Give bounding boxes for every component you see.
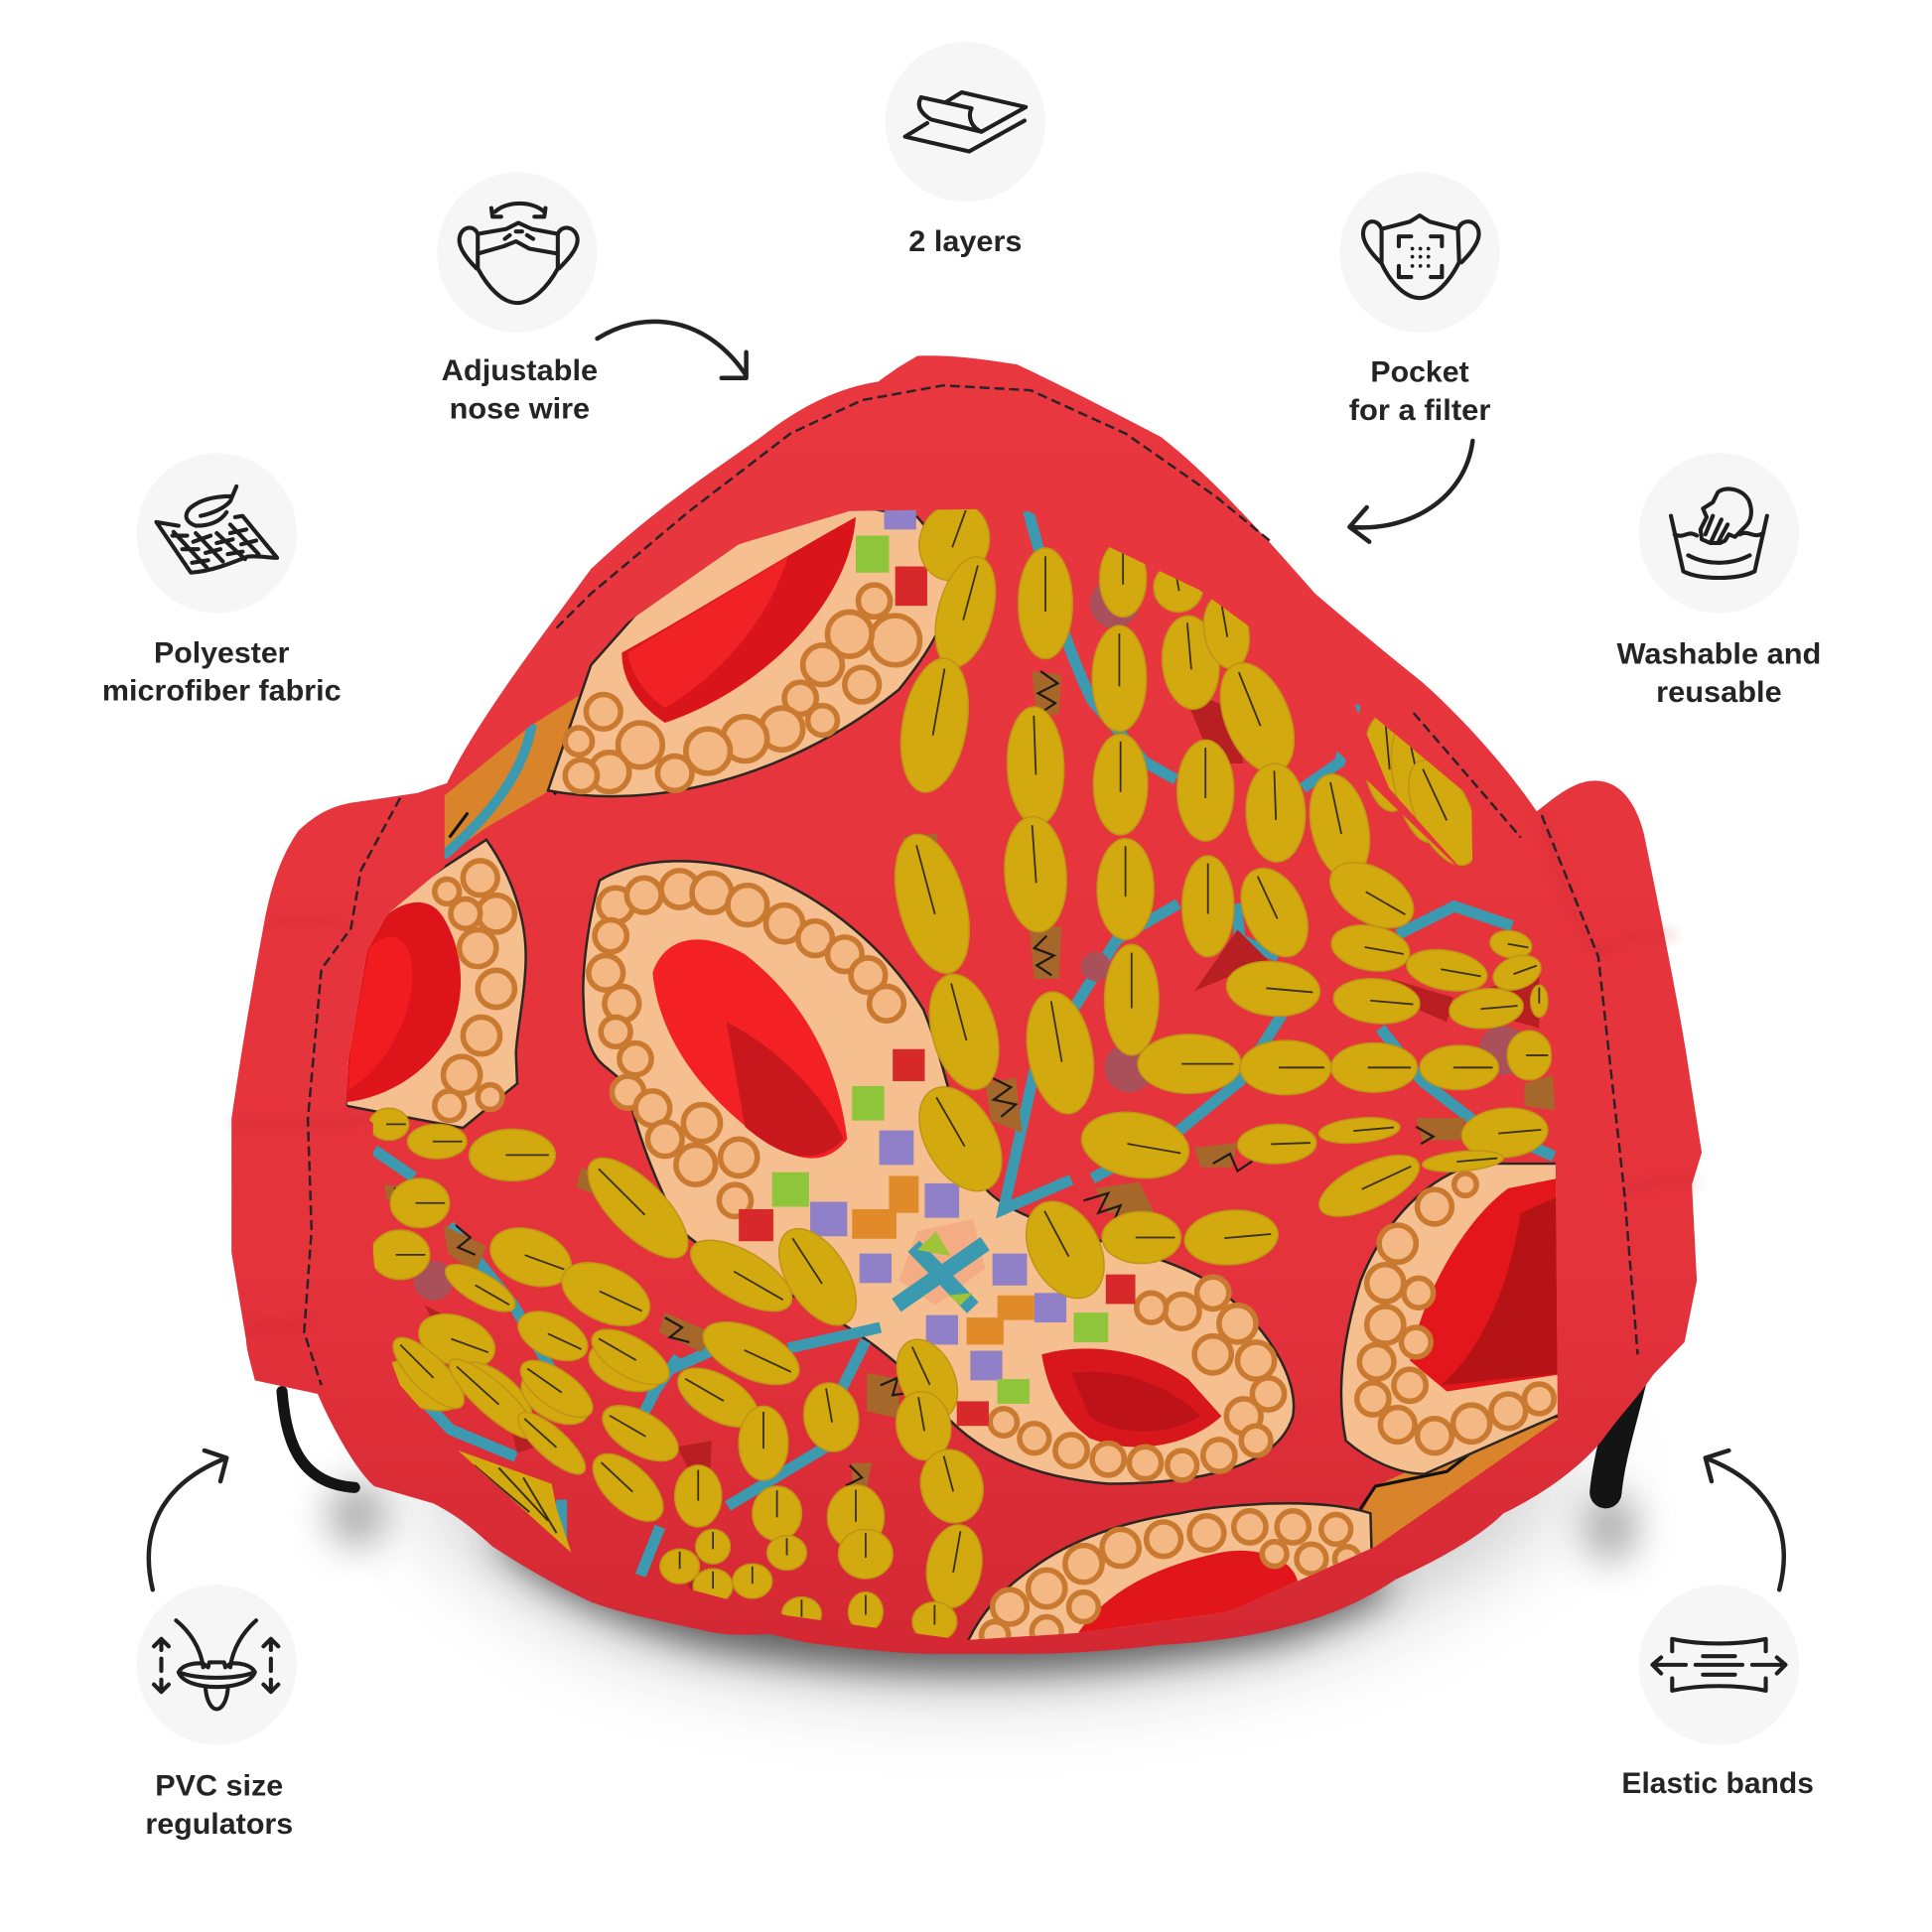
label [442, 354, 598, 426]
feature: 2 layers [886, 42, 1045, 258]
feature: elastic bands [1621, 1585, 1814, 1800]
label: nose wire [450, 393, 590, 426]
right elastic band [1605, 1361, 1635, 1492]
orange patches [437, 690, 1564, 1554]
icon: fabric and feather [157, 486, 277, 573]
ring beads [435, 585, 1554, 1649]
twine knots [394, 671, 1434, 1495]
icon: mask with filter pocket [1363, 215, 1479, 298]
label: Elastic bands [1621, 1767, 1814, 1800]
label: reusable [1656, 676, 1782, 709]
icon: size regulator [154, 1620, 278, 1710]
icon: layers [905, 92, 1026, 152]
teal lines [374, 511, 1554, 1577]
arrow: pocket [1349, 441, 1472, 542]
icon: stretching band [1652, 1639, 1785, 1691]
icon: hand wash tub [1671, 488, 1767, 578]
ground shadow [328, 1453, 1638, 1681]
label [145, 1769, 293, 1841]
mask body [231, 355, 1702, 1654]
label: regulators [145, 1808, 293, 1841]
label: Pocket [1370, 355, 1469, 388]
label [102, 636, 342, 708]
label: 2 layers [908, 225, 1022, 258]
label: for a filter [1349, 394, 1491, 427]
fabric folds [231, 813, 1697, 1329]
icon: mask with nose wire [460, 204, 578, 303]
yellow seed chains [369, 493, 1552, 1641]
arrow: elastic bands [1706, 1450, 1784, 1589]
printed pattern [346, 493, 1570, 1656]
peach leaf panels [346, 505, 1570, 1656]
arrow: nose wire [598, 322, 747, 378]
label: microfiber fabric [102, 675, 342, 708]
label: Polyester [154, 636, 290, 669]
feature: washable [1616, 453, 1821, 709]
feature: nose wire [437, 173, 598, 426]
label: Adjustable [442, 354, 598, 387]
label: PVC size [155, 1769, 283, 1802]
feature: pocket [1339, 173, 1500, 427]
left elastic band [282, 1392, 354, 1487]
label: Washable and [1616, 638, 1821, 671]
stitching [304, 385, 1638, 1385]
feature: PVC regulators [137, 1585, 297, 1841]
centre cubes and cross [739, 507, 1136, 1426]
label [1349, 355, 1491, 427]
brown chain links and dark red joints [384, 671, 1558, 1492]
label [1616, 638, 1821, 709]
mask [231, 355, 1702, 1656]
feature: polyester [102, 453, 342, 708]
red leaves [346, 517, 1570, 1644]
arrow: PVC regulators [149, 1450, 226, 1589]
